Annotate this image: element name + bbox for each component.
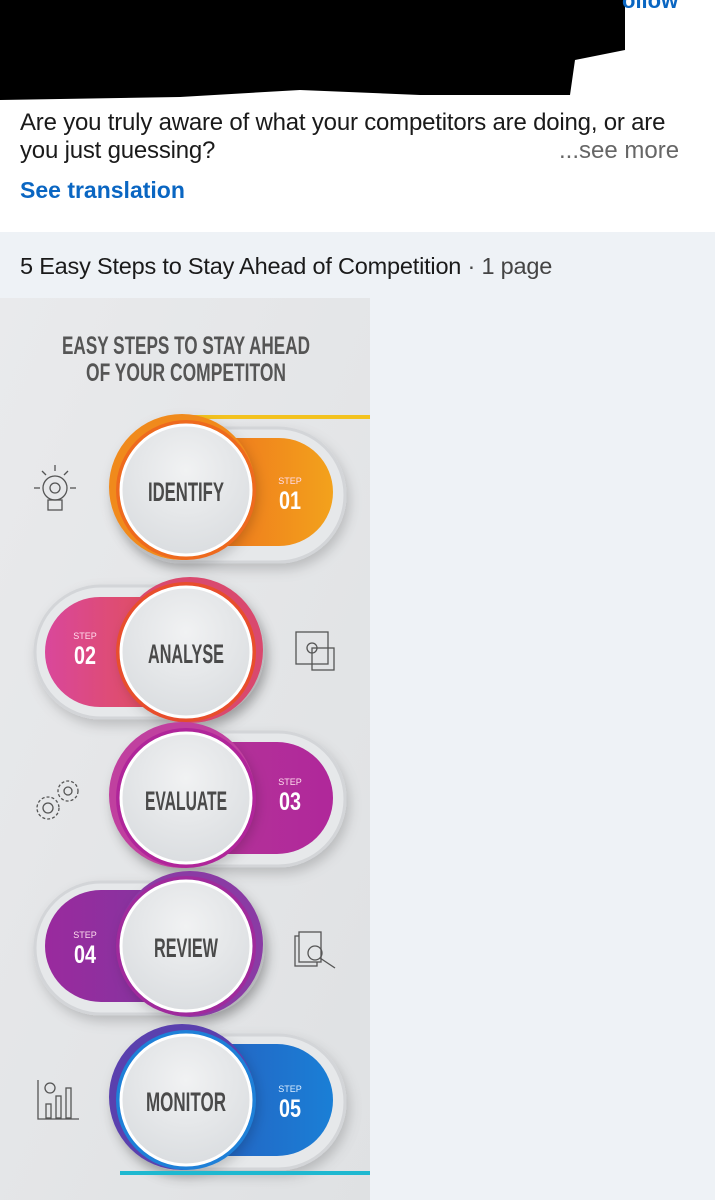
title [62,332,310,387]
step 5: monitor: STEP [278,1084,302,1094]
step 2: analyse: STEP [73,631,97,641]
step 5: monitor: 05 [279,1095,301,1123]
post text [20,109,665,164]
icon: puzzle [296,632,334,670]
step 4: review: 04 [74,941,96,969]
step 2: analyse: 02 [74,642,96,670]
document heading: 5 Easy Steps to Stay Ahead of Competition · 1 page [20,253,552,279]
icon: lightbulb gear [34,465,76,510]
step 1: identify: IDENTIFY [148,477,224,507]
top yellow line [190,415,370,419]
step 3: evaluate: 03 [279,788,301,816]
step 1: identify: STEP [278,476,302,486]
see translation link: See translation [20,177,185,203]
step 5: monitor [109,1024,345,1170]
icon: gears [37,781,78,819]
icon: document magnifier [295,932,335,968]
step 3: evaluate [109,722,345,868]
icon: chart arrows [38,1080,79,1119]
step 5: monitor: MONITOR [146,1087,226,1117]
post text: Are you truly aware of what your competitors are doing, or are [20,109,665,136]
step 1: identify: 01 [279,487,301,515]
step 1: identify [109,414,345,562]
infographic panel [0,298,370,1200]
see more: ...see more [559,137,679,164]
step 3: evaluate: STEP [278,777,302,787]
redacted header blob [0,0,625,100]
step 3: evaluate: EVALUATE [145,786,227,816]
step 2: analyse [35,577,263,723]
post text: you just guessing? [20,137,215,164]
step 4: review: REVIEW [154,933,218,963]
step 4: review: STEP [73,930,97,940]
step 4: review [35,871,263,1017]
bottom teal line [120,1171,370,1175]
step 2: analyse: ANALYSE [148,639,224,669]
title: OF YOUR COMPETITON [86,359,286,387]
